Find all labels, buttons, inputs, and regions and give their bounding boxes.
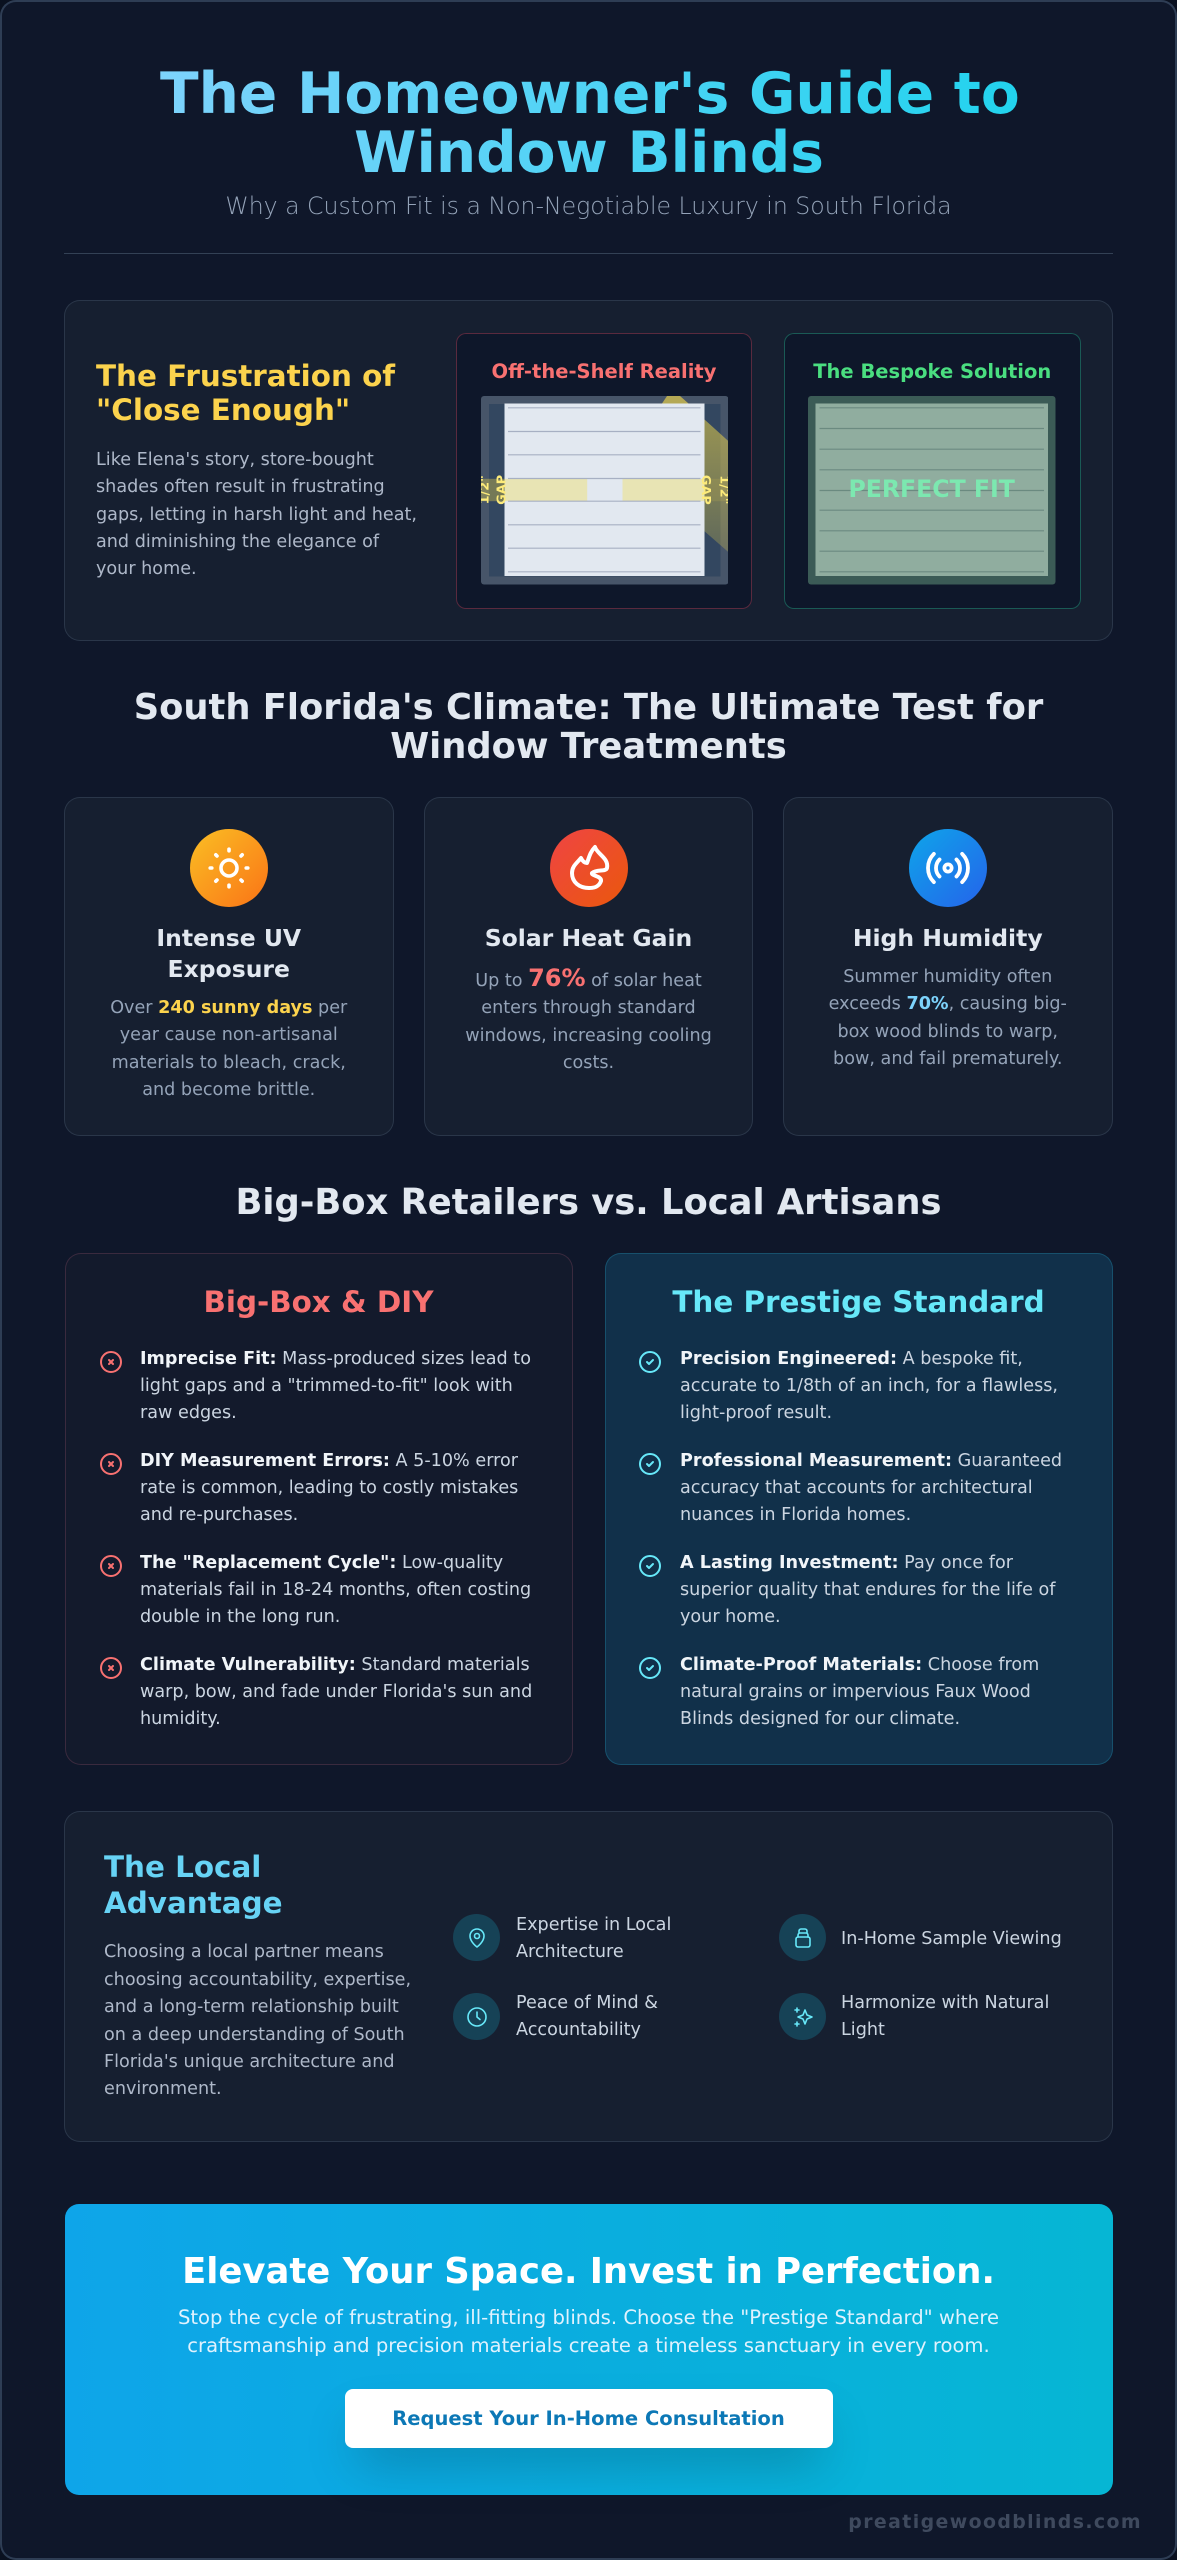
heading: UV: Exposure [168, 955, 290, 983]
icon: flame [550, 829, 628, 907]
text: heat description: windows, increasing cooling [465, 1026, 712, 1046]
text: humidity description: bow, and fail prematurely. [833, 1049, 1062, 1069]
heading: climate section: Window Treatments [390, 726, 787, 767]
item: lasting investment: your home. [680, 1607, 781, 1627]
item: climate-proof materials: Blinds designed for our climate. [680, 1709, 960, 1729]
text: humidity description: box wood blinds to warp, [837, 1022, 1058, 1042]
item: professional measurement [680, 1451, 1062, 1525]
heading: prestige: The Prestige Standard [672, 1284, 1045, 1318]
icon: sample jar [779, 1914, 826, 1961]
feature: natural light: Harmonize with Natural [841, 1993, 1049, 2013]
icon: check circle [639, 1351, 661, 1373]
item: imprecise fit [140, 1349, 531, 1423]
watermark: preatigewoodblinds.com [848, 2510, 1142, 2532]
heading: frustration: "Close Enough" [96, 393, 350, 427]
text: humidity description: Summer humidity often [843, 967, 1052, 987]
panel: local advantage [64, 1811, 1112, 2142]
text: heat description: Up to 76% of solar heat [475, 964, 702, 992]
heading: UV [156, 924, 301, 983]
title [160, 65, 1018, 183]
icon: humidity signal [909, 829, 987, 907]
text: heat description: enters through standard [481, 998, 696, 1018]
item: lasting investment: A Lasting Investment: Pay once for [680, 1553, 1013, 1573]
text: frustration description: your home. [96, 559, 197, 579]
heading: local advantage [104, 1850, 283, 1920]
text: heat description [465, 964, 712, 1073]
feature: local architecture: Expertise in Local [516, 1915, 671, 1935]
text: call to action description: Stop the cycle of frustrating, ill-fitting blinds. Choose the "Prestige Standard" where [178, 2306, 999, 2329]
item: climate-proof materials [680, 1655, 1039, 1729]
icon: check circle [639, 1657, 661, 1679]
heading: big-box: Big-Box & DIY [204, 1284, 433, 1318]
text: frustration description: and diminishing the elegance of [96, 532, 379, 552]
illustration: ill-fitting blind: GAP [698, 475, 712, 505]
item: measurement errors: rate is common, leading to costly mistakes [140, 1478, 518, 1498]
feature: local architecture: Architecture [516, 1942, 624, 1962]
text: local description: Choosing a local partner means [104, 1942, 384, 1962]
item: imprecise fit: Imprecise Fit: Mass-produced sizes lead to [140, 1349, 531, 1369]
text: local description: choosing accountability, expertise, [104, 1970, 411, 1990]
label: off-the-shelf: Off-the-Shelf Reality [492, 360, 716, 383]
heading: climate section: South Florida's Climate: The Ultimate Test for [134, 687, 1043, 728]
panel: bespoke solution [784, 333, 1080, 609]
text: local description: and a long-term relationship built [104, 1997, 399, 2017]
heading: frustration [96, 358, 396, 427]
text: call to action description [178, 2306, 999, 2357]
panel: high humidity [783, 797, 1112, 1136]
text: frustration description [96, 450, 417, 579]
text: local description: Florida's unique architecture and [104, 2052, 395, 2072]
panel: frustration of close enough [64, 300, 1112, 641]
icon: check circle [639, 1453, 661, 1475]
text: UV description: and become brittle. [142, 1080, 315, 1100]
item: imprecise fit: raw edges. [140, 1403, 237, 1423]
feature: natural light [841, 1993, 1049, 2040]
text: UV description: year cause non-artisanal [120, 1025, 338, 1045]
heading: comparison section: Big-Box Retailers vs. Local Artisans [235, 1182, 942, 1223]
text: UV description: materials to bleach, crack, [112, 1053, 346, 1073]
illustration: ill-fitting blind: GAP [494, 475, 509, 505]
text: local description: environment. [104, 2079, 222, 2099]
illustration: perfect-fit blind [808, 396, 1056, 584]
item: climate-proof materials: natural grains or impervious Faux Wood [680, 1682, 1031, 1702]
icon: x circle [100, 1555, 122, 1577]
item: precision engineered: accurate to 1/8th of an inch, for a flawless, [680, 1376, 1058, 1396]
heading: UV: Intense UV [156, 924, 301, 952]
item: precision engineered: Precision Engineered: A bespoke fit, [680, 1349, 1023, 1369]
text: humidity description [829, 967, 1067, 1069]
label: bespoke: The Bespoke Solution [813, 360, 1051, 383]
item: professional measurement: Professional Measurement: Guaranteed [680, 1451, 1062, 1471]
text: UV description: Over 240 sunny days per [110, 998, 347, 1018]
icon: sun [190, 829, 268, 907]
item: replacement cycle [140, 1553, 531, 1627]
heading: local advantage: Advantage [104, 1886, 283, 1920]
item: climate vulnerability: humidity. [140, 1709, 221, 1729]
text: humidity description: exceeds 70%, causing big- [829, 994, 1067, 1014]
item: lasting investment: superior quality that endures for the life of [680, 1580, 1055, 1600]
subtitle: Why a Custom Fit is a Non-Negotiable Luxury in South Florida [225, 192, 952, 220]
panel: call to action [64, 2204, 1112, 2495]
button: consultation: Request Your In-Home Consultation [392, 2407, 785, 2430]
item: replacement cycle: materials fail in 18-24 months, often costing [140, 1580, 531, 1600]
text: local description [104, 1942, 411, 2099]
icon: sparkles [779, 1993, 826, 2040]
item: climate vulnerability: warp, bow, and fade under Florida's sun and [140, 1682, 532, 1702]
item: professional measurement: nuances in Florida homes. [680, 1505, 911, 1525]
item: measurement errors [140, 1451, 518, 1525]
item: measurement errors: DIY Measurement Errors: A 5-10% error [140, 1451, 518, 1471]
feature: peace of mind: Accountability [516, 2020, 641, 2040]
feature: peace of mind: Peace of Mind & [516, 1993, 658, 2013]
panel: intense UV exposure [64, 797, 394, 1136]
item: imprecise fit: light gaps and a "trimmed-to-fit" look with [140, 1376, 513, 1396]
item: lasting investment [680, 1553, 1056, 1627]
icon: check circle [639, 1555, 661, 1577]
item: precision engineered: light-proof result. [680, 1403, 832, 1423]
feature: local architecture [516, 1915, 671, 1962]
item: measurement errors: and re-purchases. [140, 1505, 298, 1525]
title: The Homeowner's Guide to [160, 61, 1020, 127]
panel: prestige standard [604, 1253, 1112, 1765]
text: UV description [110, 998, 348, 1100]
heading: humidity: High Humidity [853, 924, 1043, 952]
text: frustration description: shades often result in frustrating [96, 477, 385, 497]
text: frustration description: Like Elena's story, store-bought [96, 450, 374, 470]
panel: big-box and DIY [64, 1253, 572, 1765]
panel: off-the-shelf reality [456, 333, 752, 609]
icon: x circle [100, 1453, 122, 1475]
feature: sample viewing: In-Home Sample Viewing [841, 1929, 1062, 1949]
feature: peace of mind [516, 1993, 658, 2040]
item: replacement cycle: The "Replacement Cycle": Low-quality [140, 1553, 503, 1573]
text: local description: on a deep understanding of South [104, 2025, 405, 2045]
heading: climate section [134, 687, 1044, 767]
feature: natural light: Light [841, 2020, 885, 2040]
text: frustration description: gaps, letting in harsh light and heat, [96, 505, 417, 525]
item: precision engineered [680, 1349, 1058, 1423]
panel: solar heat gain [424, 797, 753, 1136]
text: heat description: costs. [563, 1053, 614, 1073]
button: consultation [344, 2389, 832, 2448]
icon: x circle [100, 1351, 122, 1373]
icon: x circle [100, 1657, 122, 1679]
heading: call to action: Elevate Your Space. Invest in Perfection. [182, 2251, 995, 2292]
title: Window Blinds [354, 120, 824, 186]
heading: heat: Solar Heat Gain [485, 924, 692, 952]
illustration: perfect-fit blind: PERFECT FIT [849, 475, 1015, 503]
heading: frustration: The Frustration of [96, 358, 395, 392]
item: climate-proof materials: Climate-Proof Materials: Choose from [680, 1655, 1039, 1675]
illustration: ill-fitting blind [481, 396, 728, 584]
item: replacement cycle: double in the long run. [140, 1607, 340, 1627]
item: climate vulnerability: Climate Vulnerability: Standard materials [140, 1655, 530, 1675]
item: climate vulnerability [140, 1655, 532, 1729]
icon: clock [453, 1993, 500, 2040]
text: call to action description: craftsmanship and precision materials create a timeless sanctuary in every room. [187, 2334, 990, 2357]
item: professional measurement: accuracy that accounts for architectural [680, 1478, 1033, 1498]
heading: local advantage: The Local [104, 1850, 261, 1884]
icon: map pin [453, 1914, 500, 1961]
